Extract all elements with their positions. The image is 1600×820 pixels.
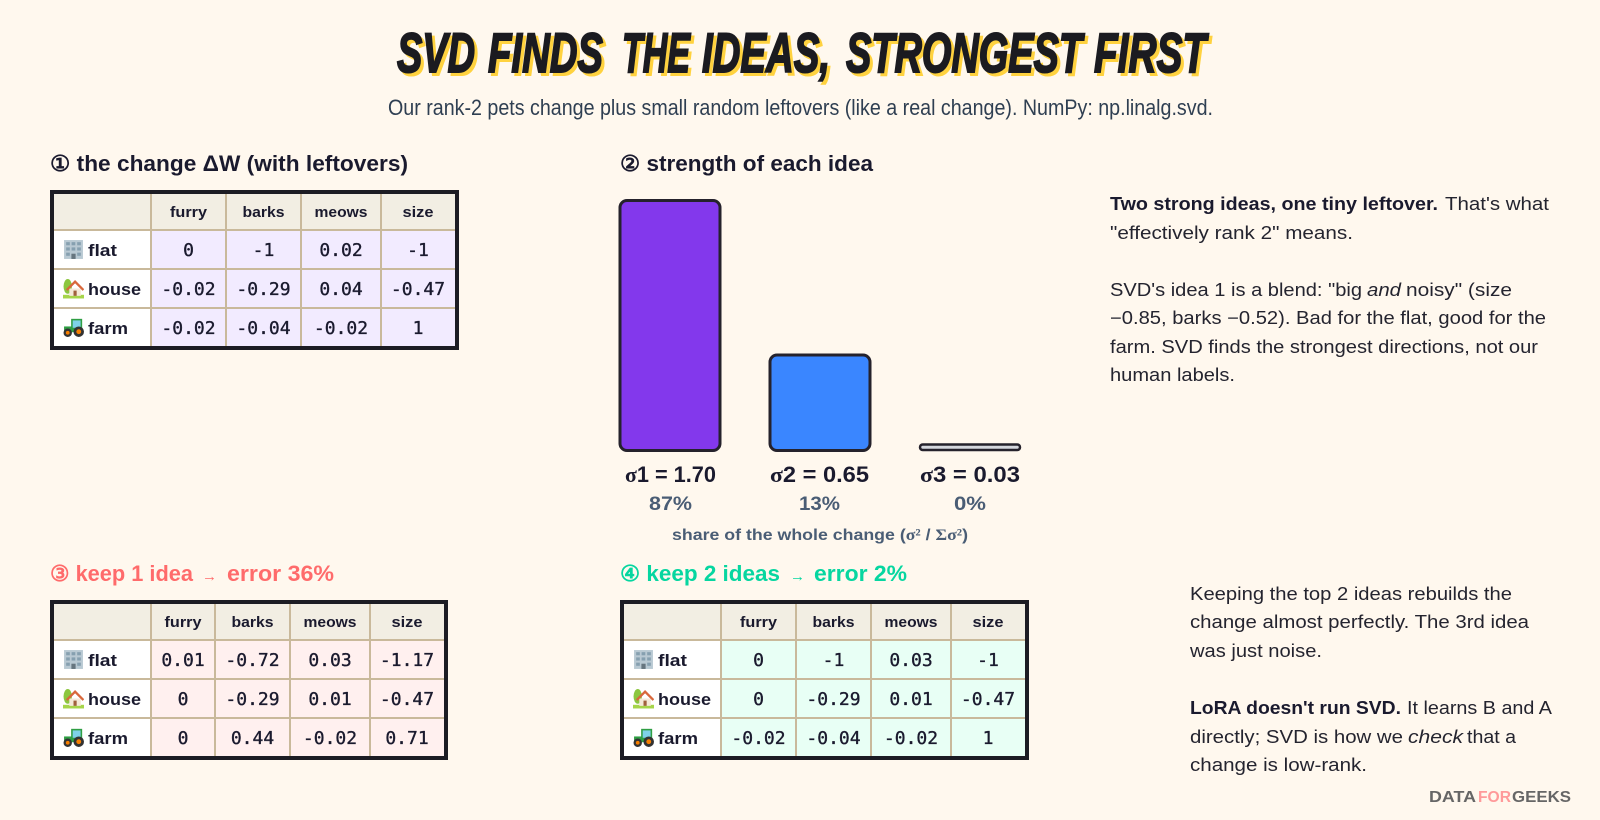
table: keep 1 idea: flat: [88, 651, 117, 670]
table: keep 1 idea: -0.47: [380, 689, 434, 710]
note: keeping the top 2 ideas: check: [1408, 727, 1464, 747]
axis caption: share of the whole change ( σ² / Σσ²): [672, 527, 968, 544]
note: keeping the top 2 ideas: directly; SVD is how we: [1190, 727, 1403, 747]
table: keep 2 ideas: -1: [823, 650, 844, 671]
note: two strong ideas: farm. SVD finds the strongest directions, not our: [1110, 337, 1538, 357]
table: keep 2 ideas: -0.04: [806, 728, 861, 749]
note: two strong ideas: −0.85, barks −0.52). Bad for the flat, good for the: [1110, 308, 1546, 328]
label: sigma 3: σ3 = 0.03: [920, 462, 1020, 487]
heading: strength of each idea: ② strength of each idea: [620, 151, 874, 176]
table: the change with leftovers: house: [88, 280, 141, 299]
note: two strong ideas: That's what: [1445, 194, 1549, 214]
heading: keep 1 idea: →: [202, 568, 217, 585]
table: the change with leftovers: farm: [88, 319, 128, 338]
note: two strong ideas: "effectively rank 2" means.: [1110, 223, 1353, 243]
share: 87 percent: 87%: [649, 494, 692, 515]
table: keep 1 idea: barks: [232, 614, 274, 631]
title: FINDS: [488, 21, 603, 84]
table: keep 2 ideas: 0.01: [889, 689, 933, 710]
table: the change with leftovers: -0.02: [161, 318, 216, 339]
heading: keep 2 ideas: →: [790, 568, 805, 585]
table: keep 2 ideas: -0.02: [884, 728, 938, 749]
note: two strong ideas: [1110, 194, 1549, 385]
note: two strong ideas: and: [1367, 280, 1402, 300]
table: the change with leftovers: meows: [314, 204, 368, 221]
note: keeping the top 2 ideas: Keeping the top 2 ideas rebuilds the: [1190, 584, 1512, 604]
heading: keep 1 idea: error 36%: [227, 561, 334, 586]
title: THE: [625, 24, 694, 87]
title: STRONGEST: [846, 21, 1085, 84]
heading: keep 1 idea: [50, 561, 334, 586]
title: IDEAS,: [705, 24, 833, 87]
heading: keep 2 ideas: error 2%: [814, 561, 907, 586]
table: keep 2 ideas: -0.29: [806, 689, 861, 710]
table: keep 1 idea: 0.01: [161, 650, 205, 671]
table: the change with leftovers: 0: [183, 240, 194, 261]
table: keep 1 idea: -0.29: [225, 689, 280, 710]
table: keep 1 idea: 0.01: [308, 689, 352, 710]
title: SVD: [400, 24, 478, 87]
table: keep 1 idea: size: [392, 614, 422, 631]
table: keep 2 ideas: barks: [812, 614, 854, 631]
heading: the change: ① the change ΔW (with leftovers): [50, 151, 408, 176]
table: keep 2 ideas: 1: [983, 728, 993, 749]
table: the change with leftovers: -1: [253, 240, 274, 261]
table: the change with leftovers: 0.02: [319, 240, 363, 261]
table: the change with leftovers: 1: [413, 318, 423, 339]
table: keep 1 idea: 0: [178, 689, 188, 710]
bar: sigma 3: [920, 444, 1020, 450]
title: THE: [622, 21, 691, 84]
table: keep 1 idea: 0.71: [385, 728, 429, 749]
table: keep 1 idea: [52, 602, 446, 758]
table: the change with leftovers: barks: [242, 204, 284, 221]
watermark: [1429, 789, 1571, 806]
note: two strong ideas: noisy" (size: [1406, 280, 1512, 300]
title: STRONGEST: [849, 24, 1088, 87]
table: keep 2 ideas: -0.02: [731, 728, 786, 749]
note: keeping the top 2 ideas: It learns B and A: [1407, 698, 1552, 718]
table: the change with leftovers: -0.02: [161, 279, 216, 300]
share: 0 percent: 0%: [954, 494, 986, 515]
note: keeping the top 2 ideas: that a: [1467, 727, 1517, 747]
label: sigma 1: σ1 = 1.70: [625, 462, 716, 487]
watermark: FOR: [1478, 789, 1511, 806]
table: keep 2 ideas: furry: [740, 614, 778, 631]
table: the change with leftovers: -0.29: [236, 279, 291, 300]
note: two strong ideas: SVD's idea 1 is a blend: "big: [1110, 280, 1362, 300]
table: keep 2 ideas: 0: [753, 650, 764, 671]
table: keep 1 idea: meows: [304, 614, 356, 631]
title: [397, 21, 1212, 87]
table: keep 2 ideas: farm: [658, 729, 698, 748]
table: the change with leftovers: furry: [170, 204, 208, 221]
note: keeping the top 2 ideas: change almost perfectly. The 3rd idea: [1190, 612, 1530, 632]
note: two strong ideas: human labels.: [1110, 365, 1235, 385]
title: IDEAS,: [702, 21, 830, 84]
bar chart: singular values: [620, 200, 1020, 544]
table: keep 1 idea: house: [88, 690, 141, 709]
title: FIRST: [1094, 21, 1209, 84]
heading: keep 2 ideas: [620, 561, 907, 586]
table: keep 2 ideas: -0.47: [961, 689, 1015, 710]
heading: keep 1 idea: ③ keep 1 idea: [50, 561, 194, 586]
table: keep 2 ideas: -1: [977, 650, 999, 671]
table: keep 2 ideas: size: [972, 614, 1004, 631]
title: FINDS: [491, 24, 606, 87]
note: keeping the top 2 ideas: [1189, 584, 1552, 775]
table: the change with leftovers: [52, 192, 457, 348]
table: keep 1 idea: furry: [164, 614, 202, 631]
table: keep 1 idea: -0.72: [225, 650, 280, 671]
watermark: GEEKS: [1512, 789, 1571, 806]
table: the change with leftovers: -1: [407, 240, 429, 261]
table: the change with leftovers: -0.02: [314, 318, 368, 339]
share: 13 percent: 13%: [799, 494, 840, 515]
table: keep 1 idea: 0.44: [231, 728, 274, 749]
table: keep 2 ideas: meows: [884, 614, 938, 631]
note: keeping the top 2 ideas: change is low-rank.: [1190, 755, 1367, 775]
table: the change with leftovers: -0.04: [236, 318, 291, 339]
table: keep 2 ideas: 0: [753, 689, 764, 710]
table: keep 1 idea: -0.02: [303, 728, 357, 749]
table: keep 2 ideas: 0.03: [889, 650, 933, 671]
table: keep 1 idea: 0.03: [308, 650, 352, 671]
title: SVD: [397, 21, 475, 84]
table: the change with leftovers: size: [402, 204, 434, 221]
label: sigma 2: σ2 = 0.65: [770, 462, 869, 487]
bar: sigma 2: [770, 355, 870, 450]
note: two strong ideas: Two strong ideas, one tiny leftover.: [1110, 194, 1438, 214]
table: keep 2 ideas: [622, 602, 1027, 758]
table: the change with leftovers: flat: [88, 241, 117, 260]
watermark: DATA: [1429, 789, 1476, 806]
table: the change with leftovers: -0.47: [391, 279, 445, 300]
bar: sigma 1: [620, 200, 720, 450]
table: keep 1 idea: farm: [88, 729, 128, 748]
table: keep 2 ideas: house: [658, 690, 711, 709]
table: the change with leftovers: 0.04: [319, 279, 363, 300]
note: keeping the top 2 ideas: LoRA doesn't run SVD.: [1190, 698, 1401, 718]
table: keep 2 ideas: flat: [658, 651, 687, 670]
note: keeping the top 2 ideas: was just noise.: [1189, 641, 1322, 661]
title: FIRST: [1097, 24, 1212, 87]
table: keep 1 idea: 0: [178, 728, 188, 749]
table: keep 1 idea: -1.17: [380, 650, 434, 671]
heading: keep 2 ideas: ④ keep 2 ideas: [620, 561, 780, 586]
subtitle: Our rank-2 pets change plus small random leftovers (like a real change). NumPy: np.linalg.svd.: [388, 95, 1213, 120]
